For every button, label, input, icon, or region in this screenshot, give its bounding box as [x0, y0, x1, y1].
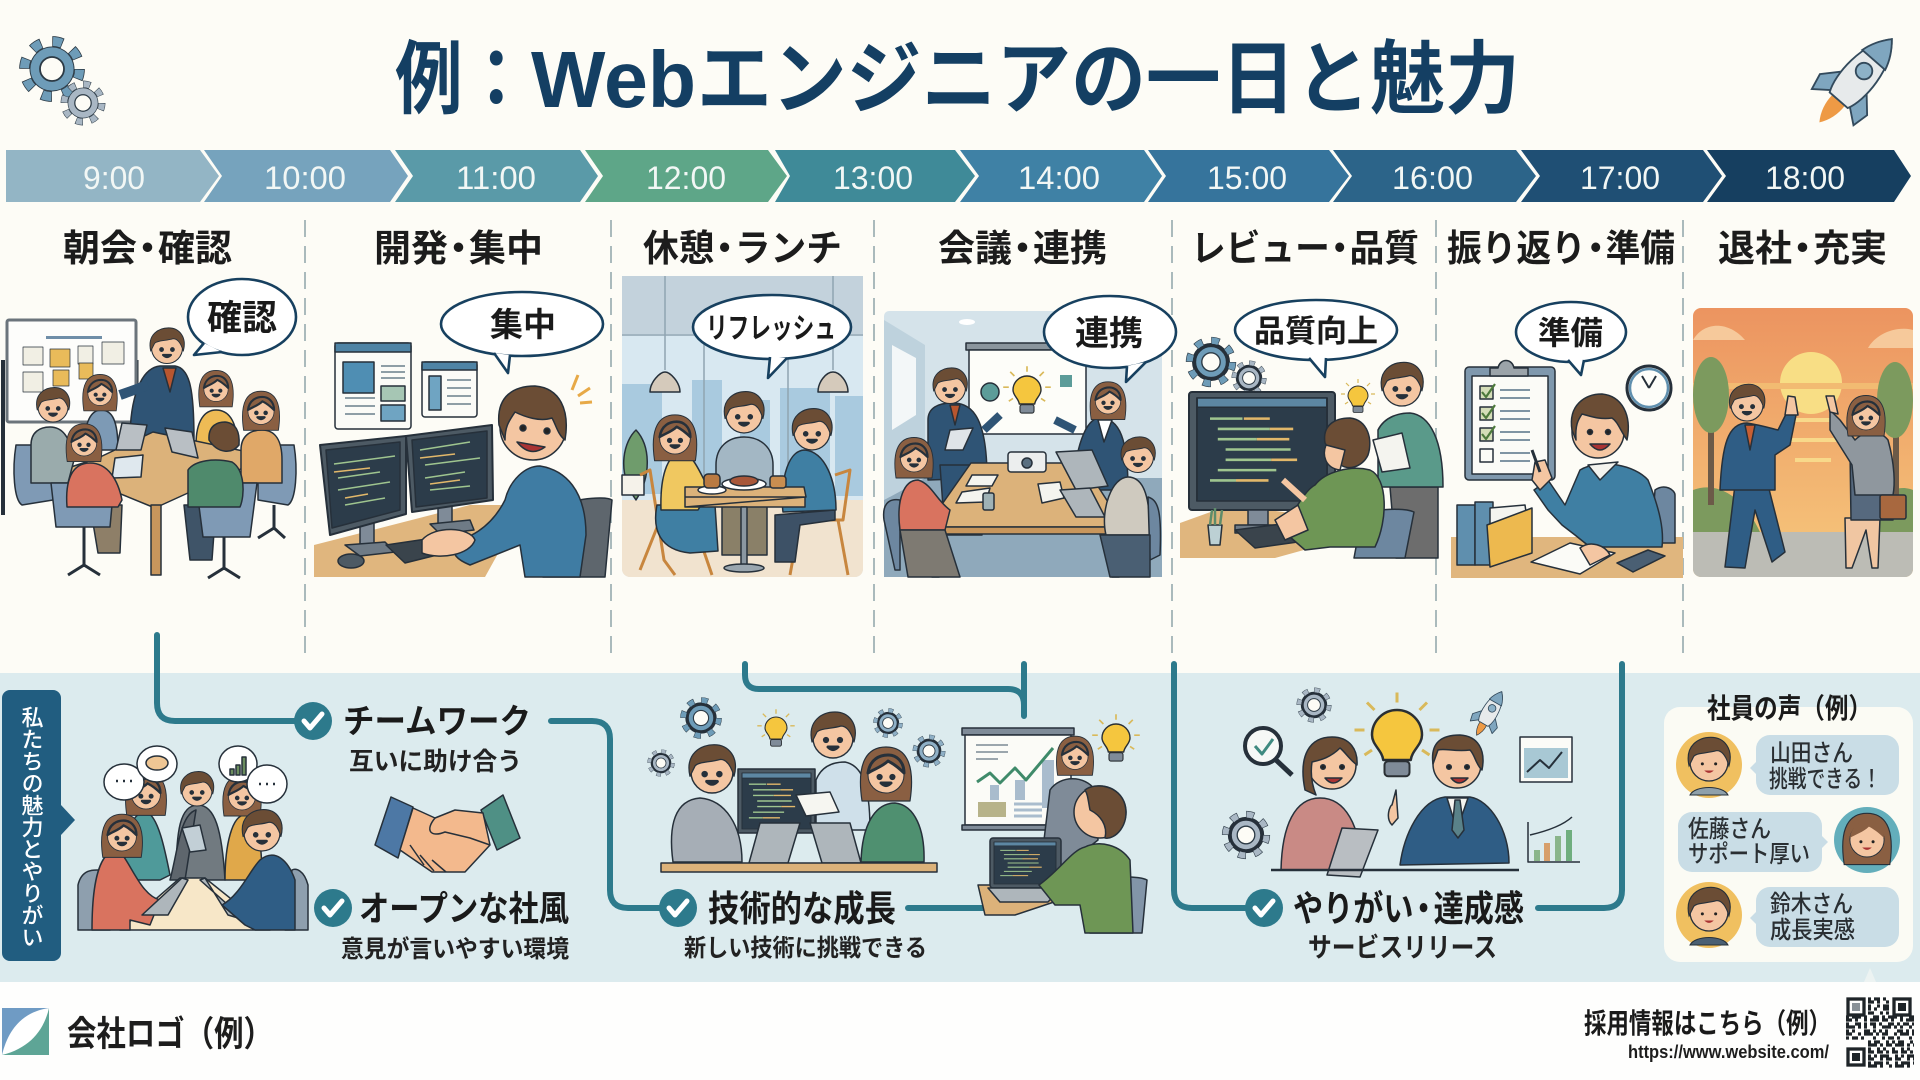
icon: rocket: [1796, 19, 1915, 143]
text: technical growth: [659, 888, 927, 962]
timeline: 13:00: [833, 160, 913, 196]
voice: Sato: [1678, 807, 1900, 873]
speech bubble: リフレッシュ: [693, 295, 851, 378]
scene: leaving work at sunset: [1693, 308, 1913, 577]
speech bubble: リフレッシュ: リフレッシュ: [706, 313, 836, 345]
timeline: 12:00: [646, 160, 726, 196]
voice: Suzuki: 鈴木さん: [1770, 891, 1853, 918]
headings: [63, 228, 1887, 269]
voice: Suzuki: 成長実感: [1770, 916, 1855, 944]
panel: our appeal: [0, 673, 1920, 982]
text: technical growth: 新しい技術に挑戦できる: [684, 935, 927, 962]
recruiting text: [1584, 1008, 1831, 1062]
voice: Sato: サポート厚い: [1688, 841, 1810, 868]
voice: Yamada: 山田さん: [1770, 740, 1853, 767]
voices heading: 社員の声（例）: [1707, 693, 1872, 724]
speech bubble: 集中: 集中: [490, 306, 556, 343]
text: teamwork: 互いに助け合う: [349, 748, 522, 776]
title: エンジニアの一日と魅力: [697, 35, 1520, 124]
scene: technical growth: [650, 701, 943, 872]
speech bubble: 連携: [1044, 296, 1176, 382]
speech bubble: 連携: 連携: [1075, 315, 1143, 353]
text: open culture: [314, 889, 569, 963]
scene: morning meeting: [3, 320, 296, 578]
voice: Sato: 佐藤さん: [1688, 816, 1771, 843]
timeline: 9:00: [83, 160, 145, 196]
headings: 退社・充実: [1718, 228, 1887, 269]
speech bubble: 準備: [1516, 302, 1626, 375]
headings: 朝会・確認: [63, 228, 232, 269]
text: teamwork: チームワーク: [343, 703, 531, 741]
speech bubble: 準備: 準備: [1538, 315, 1603, 351]
scene: lunch break: [622, 276, 863, 577]
timeline: 11:00: [456, 160, 536, 196]
side label: [2, 690, 75, 961]
title: 例：: [395, 35, 530, 124]
timeline: 16:00: [1392, 160, 1473, 196]
voice: Yamada: [1676, 732, 1899, 798]
speech bubble: 集中: [441, 292, 603, 373]
text: open culture: 意見が言いやすい環境: [341, 935, 569, 963]
scene: code review: [1180, 341, 1443, 558]
scene: rewarding work: [1226, 684, 1580, 877]
headings: 開発・集中: [374, 228, 543, 269]
voice: Suzuki: [1676, 882, 1899, 948]
recruiting text: https://www.website.com/: [1628, 1042, 1829, 1062]
speech bubble: 品質向上: [1235, 300, 1397, 377]
text: rewarding work: やりがい・達成感: [1293, 888, 1524, 929]
speech bubble: 確認: [188, 279, 296, 355]
text: technical growth: 技術的な成長: [708, 888, 896, 929]
text: rewarding work: サービスリリース: [1308, 933, 1497, 963]
text: open culture: オープンな社風: [359, 890, 569, 929]
side label: 私たちの魅力とやりがい: [18, 706, 44, 948]
headings: 休憩・ランチ: [643, 228, 842, 269]
icon: handshake: [375, 795, 520, 872]
text: teamwork: [294, 702, 531, 776]
text: rewarding work: [1245, 888, 1524, 963]
speech bubble: 品質向上: 品質向上: [1254, 314, 1378, 349]
footer logo: [2, 1008, 49, 1055]
headings: レビュー・品質: [1191, 228, 1419, 269]
timeline: 17:00: [1580, 160, 1660, 196]
recruiting text: 採用情報はこちら（例）: [1584, 1008, 1831, 1039]
connector lines: [157, 635, 1622, 908]
headings: 会議・連携: [938, 228, 1107, 269]
icon: gears: [24, 41, 102, 122]
headings: 振り返り・準備: [1447, 228, 1675, 269]
timeline: 18:00: [1765, 160, 1845, 196]
speech bubble: 確認: 確認: [207, 299, 277, 338]
timeline: 10:00: [264, 160, 346, 196]
voice: Yamada: 挑戦できる！: [1769, 766, 1881, 793]
scene: development: [314, 343, 612, 577]
panel: employee voices: [1664, 693, 1913, 982]
timeline: 14:00: [1018, 160, 1100, 196]
scene: meeting: [884, 311, 1162, 577]
timeline: [6, 150, 1911, 202]
company name: 会社ロゴ（例）: [67, 1014, 273, 1054]
timeline: 15:00: [1207, 160, 1287, 196]
scene: team chat: [78, 746, 308, 930]
title: Web: [531, 35, 696, 124]
scene: presentation with laptop: [962, 714, 1147, 933]
QR code: [1846, 999, 1914, 1066]
scene: wrap-up: [1451, 360, 1683, 578]
